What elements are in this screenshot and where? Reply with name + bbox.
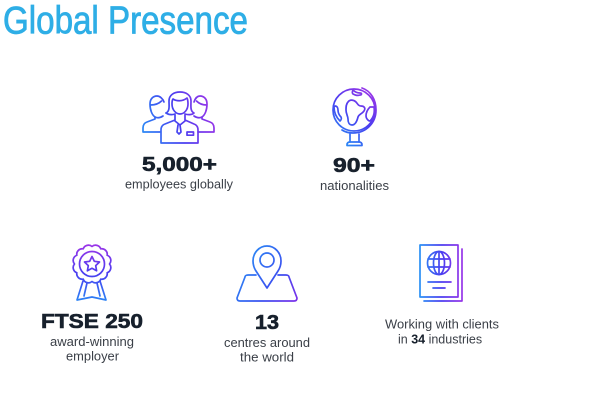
icon: three people bbox=[143, 92, 214, 143]
icon: map pin bbox=[237, 246, 297, 301]
title: Global Presence bbox=[3, 0, 248, 42]
caption: nationalities bbox=[320, 179, 389, 193]
statistic: 5,000+ bbox=[142, 154, 217, 176]
statistic: 13 bbox=[255, 312, 279, 334]
icon: globe bbox=[333, 88, 376, 146]
caption: award-winning bbox=[50, 335, 134, 349]
panel: nationalities bbox=[320, 88, 389, 193]
panel: centres: the world bbox=[240, 350, 294, 364]
icon: passport bbox=[420, 245, 462, 301]
icon: award rosette bbox=[73, 245, 111, 300]
caption: employees globally bbox=[125, 178, 234, 192]
panel: industries bbox=[385, 245, 499, 346]
panel: employees bbox=[125, 92, 234, 192]
caption: centres around bbox=[224, 336, 310, 350]
panel: FTSE 250: employer bbox=[66, 350, 119, 364]
statistic: 90+ bbox=[333, 155, 375, 177]
panel: industries: in 34 industries bbox=[398, 332, 482, 346]
statistic: FTSE 250 bbox=[41, 311, 143, 333]
panel: FTSE 250 bbox=[41, 245, 143, 364]
caption: Working with clients bbox=[385, 318, 499, 332]
panel: centres bbox=[224, 246, 310, 364]
